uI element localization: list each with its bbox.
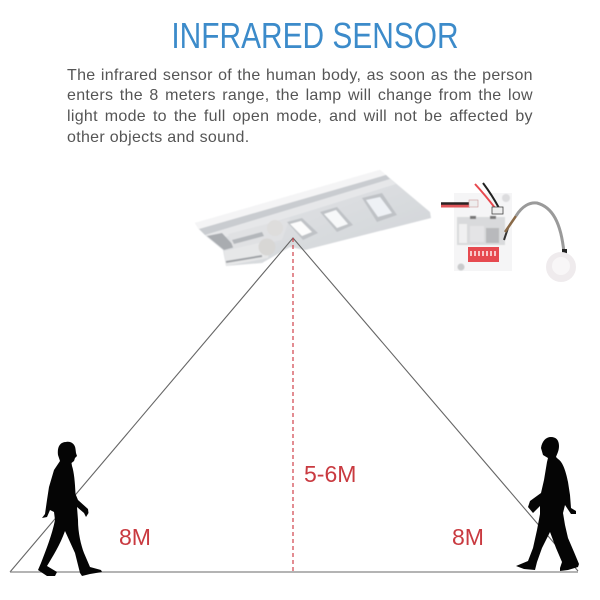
person right — [516, 437, 579, 571]
ground line — [10, 571, 578, 573]
sensor module — [441, 183, 576, 282]
person left — [38, 442, 102, 576]
description text: from — [439, 87, 472, 104]
description text: mode — [105, 108, 146, 125]
description text: the — [174, 108, 197, 125]
PIR dome — [546, 252, 576, 282]
description text: sensor — [163, 66, 213, 84]
description text: will — [348, 87, 371, 104]
description text: as — [431, 66, 448, 84]
sensor domes — [258, 220, 283, 256]
label: left 8M: 8M — [119, 524, 151, 550]
height dashed line — [292, 238, 294, 572]
label: height 5-6M: 5-6M — [304, 461, 356, 487]
description text: as — [367, 66, 384, 84]
sensing cone lines — [10, 238, 578, 572]
description text: will — [364, 108, 387, 125]
description text: enters — [67, 87, 113, 104]
description text: light — [67, 108, 98, 125]
description text: soon — [389, 66, 425, 84]
description text: range, — [222, 87, 269, 104]
description text: other objects and sound. — [67, 129, 249, 146]
description text: infrared — [101, 66, 158, 84]
description text: affected — [449, 108, 508, 125]
DIP switch — [468, 247, 499, 262]
description text: 8 — [149, 87, 159, 104]
solar street lamp — [195, 170, 431, 266]
lamp windows — [287, 193, 397, 240]
label: right 8M: 8M — [452, 524, 484, 550]
description text: by — [515, 108, 533, 125]
description text: low — [508, 87, 533, 104]
wires — [441, 183, 516, 240]
description text: mode, — [276, 108, 322, 125]
description text: human — [266, 66, 316, 84]
description text: lamp — [306, 87, 341, 104]
description text: full — [204, 108, 226, 125]
description text: the — [276, 87, 299, 104]
description text: meters — [165, 87, 216, 104]
description text: the — [120, 87, 143, 104]
title: INFRARED SENSOR — [171, 15, 459, 56]
description text: change — [378, 87, 432, 104]
description text: person — [482, 66, 533, 84]
description text: to — [153, 108, 167, 125]
description text: of — [218, 66, 232, 84]
description text: be — [424, 108, 442, 125]
cable — [516, 203, 564, 253]
description text: the — [478, 87, 501, 104]
description text: the — [454, 66, 477, 84]
description text: not — [394, 108, 417, 125]
description text: the — [237, 66, 261, 84]
description text: body, — [322, 66, 361, 84]
description text: open — [232, 108, 269, 125]
board printing — [457, 194, 510, 270]
description text: and — [329, 108, 357, 125]
description text: The — [67, 66, 95, 84]
description text — [67, 66, 533, 146]
